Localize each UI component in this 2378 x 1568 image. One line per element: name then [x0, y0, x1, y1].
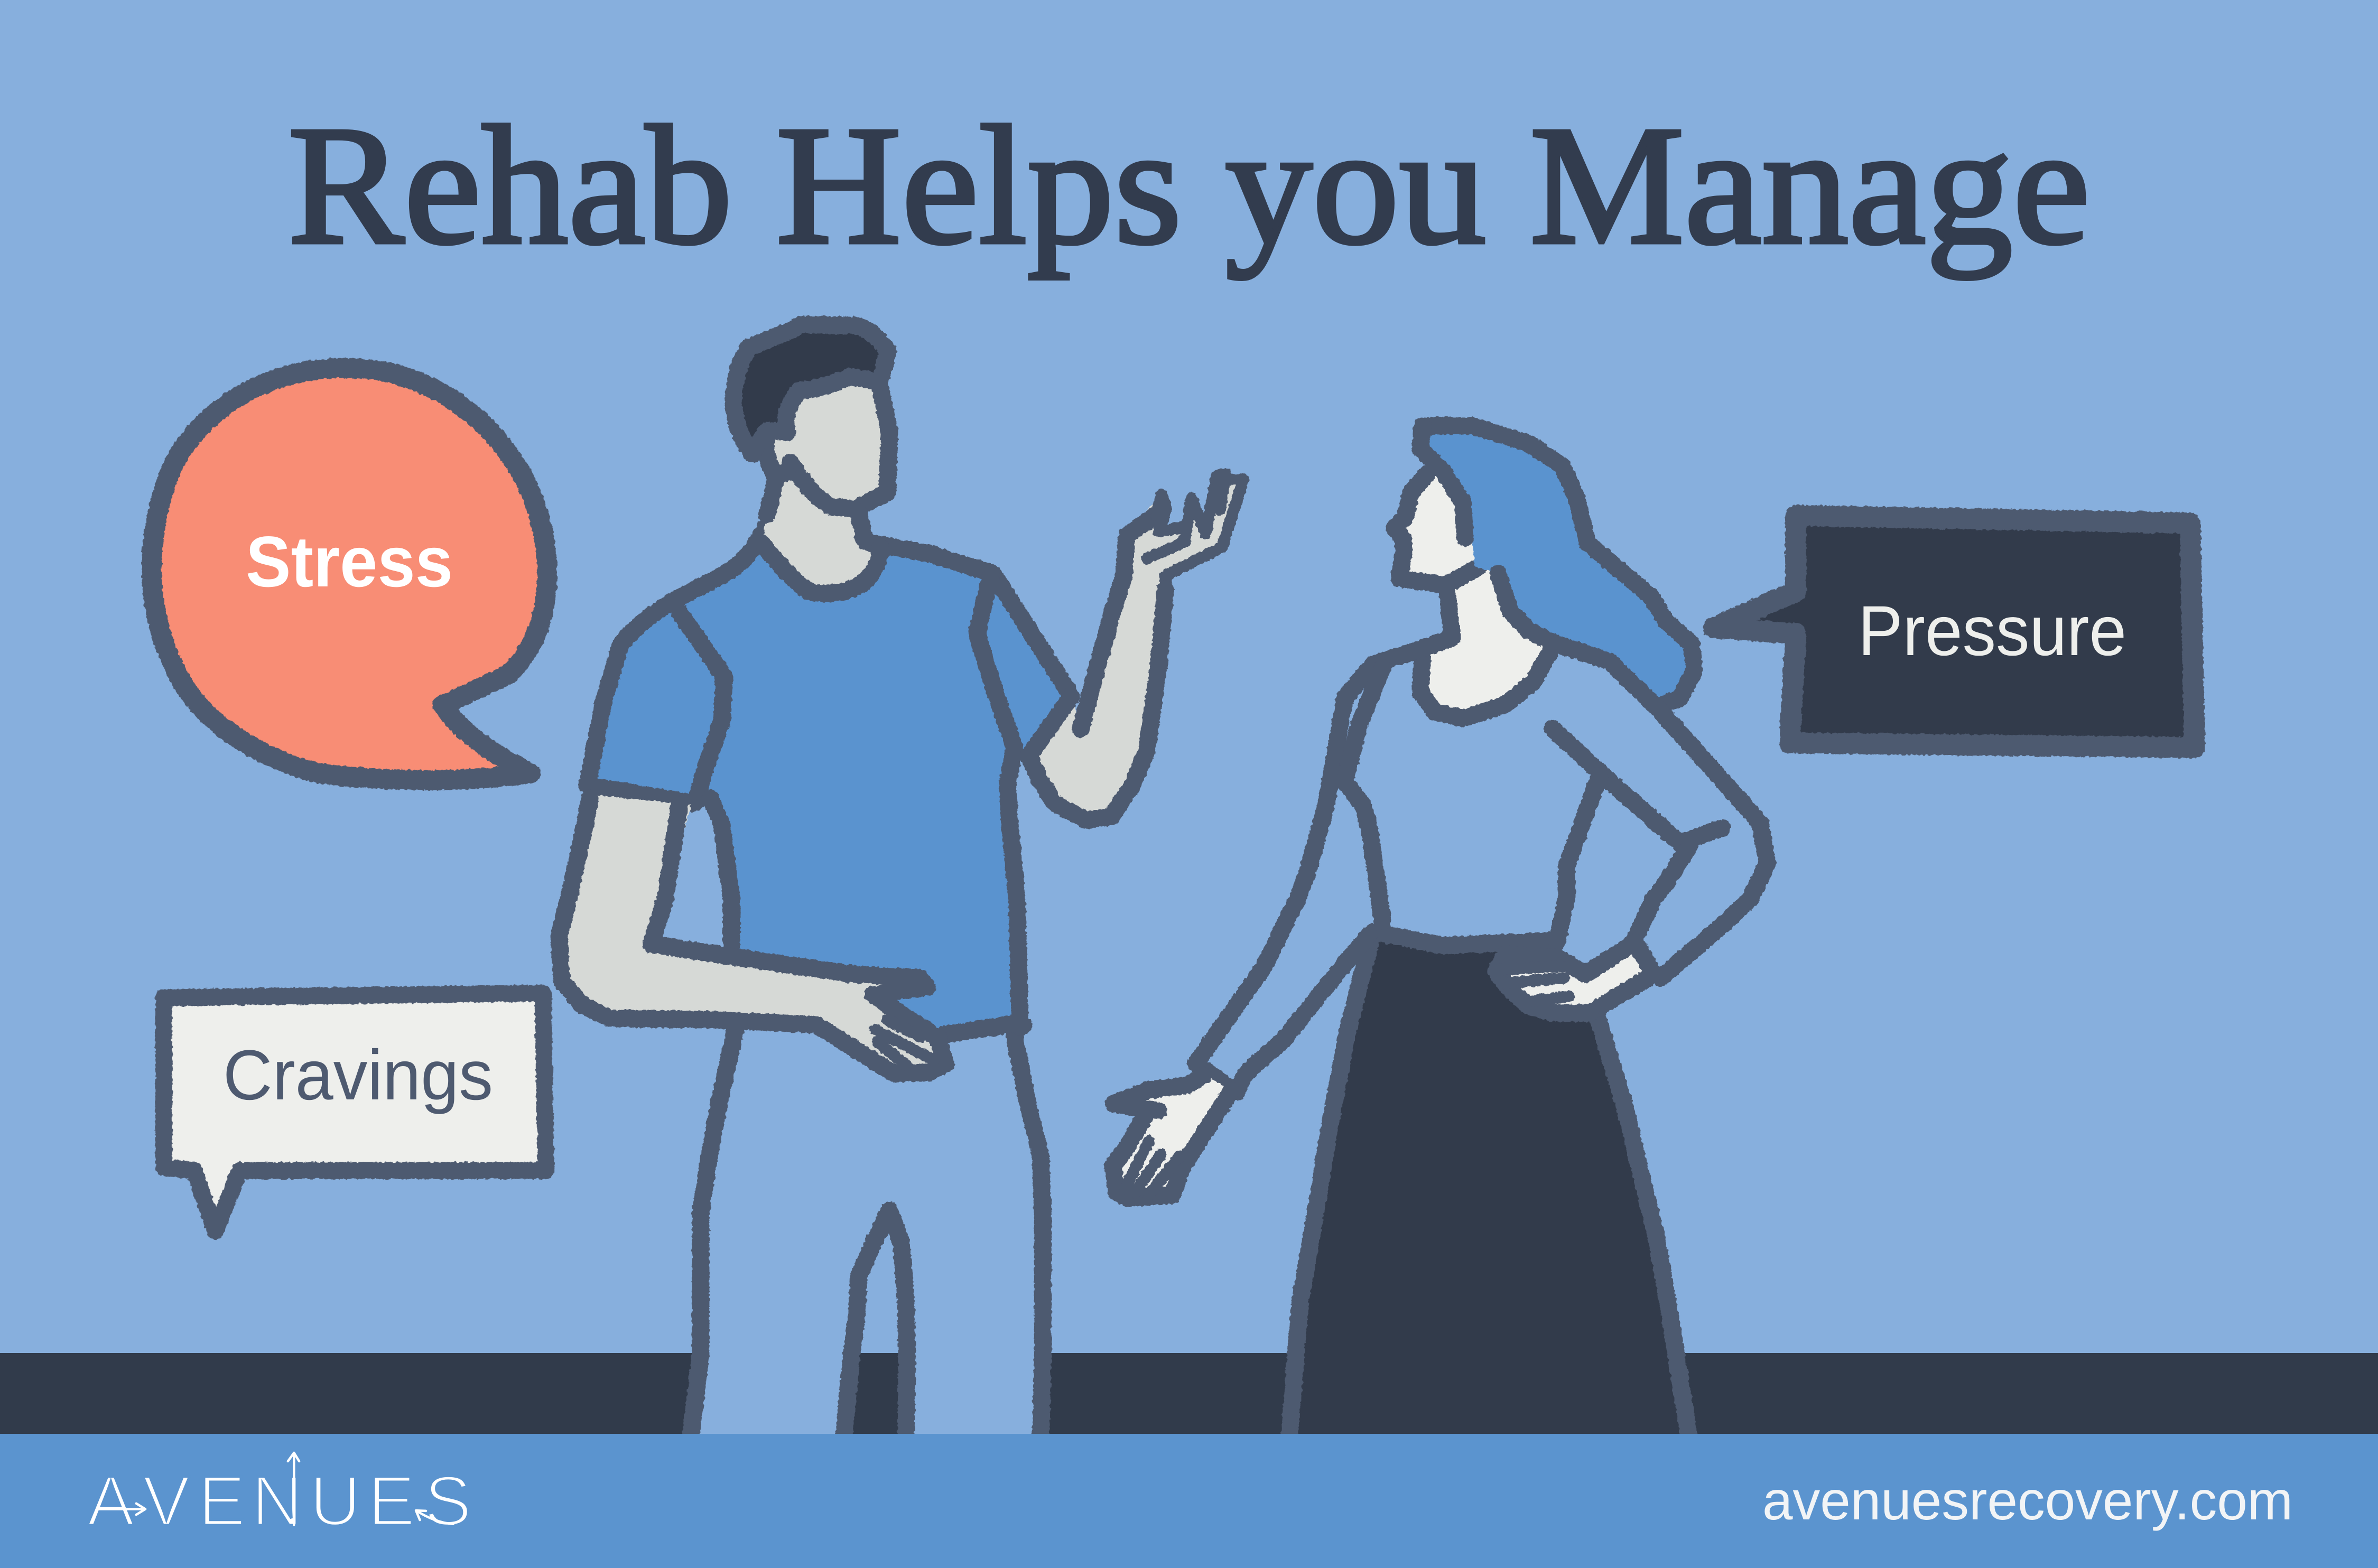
- figure: woman: [1113, 426, 1767, 1453]
- woman face and neck: [1394, 472, 1553, 718]
- man trousers: [689, 1026, 1043, 1452]
- woman open hand: [1113, 1074, 1231, 1198]
- label: cravings: Cravings: [223, 1036, 493, 1115]
- woman hair: [1420, 426, 1694, 706]
- man head and neck: [733, 324, 889, 594]
- man lowered arm and hand: [559, 795, 946, 1074]
- figure: man: [559, 324, 1243, 1452]
- footer band: [0, 1434, 2378, 1568]
- floor band: [0, 1353, 2378, 1438]
- label: pressure: Pressure: [1858, 592, 2126, 670]
- woman hand on hip: [1495, 942, 1654, 1013]
- man raised arm and hand: [1029, 474, 1243, 820]
- man t-shirt: [588, 525, 1071, 1034]
- title: Rehab Helps you Manage: [288, 91, 2090, 279]
- woman skirt: [1288, 932, 1692, 1453]
- speech bubble: cravings: [164, 993, 546, 1231]
- speech bubble: stress: [152, 368, 547, 780]
- logo: avenues: AVENUES: [87, 1462, 471, 1541]
- illustration: man and woman talking: [152, 324, 2195, 1453]
- logo arrows: [97, 1453, 453, 1525]
- website url: avenuesrecovery.com: [1762, 1470, 2293, 1532]
- speech bubble: pressure: [1714, 516, 2195, 748]
- label: stress: Stress: [246, 521, 453, 602]
- woman blouse and arms: [1196, 638, 1767, 1092]
